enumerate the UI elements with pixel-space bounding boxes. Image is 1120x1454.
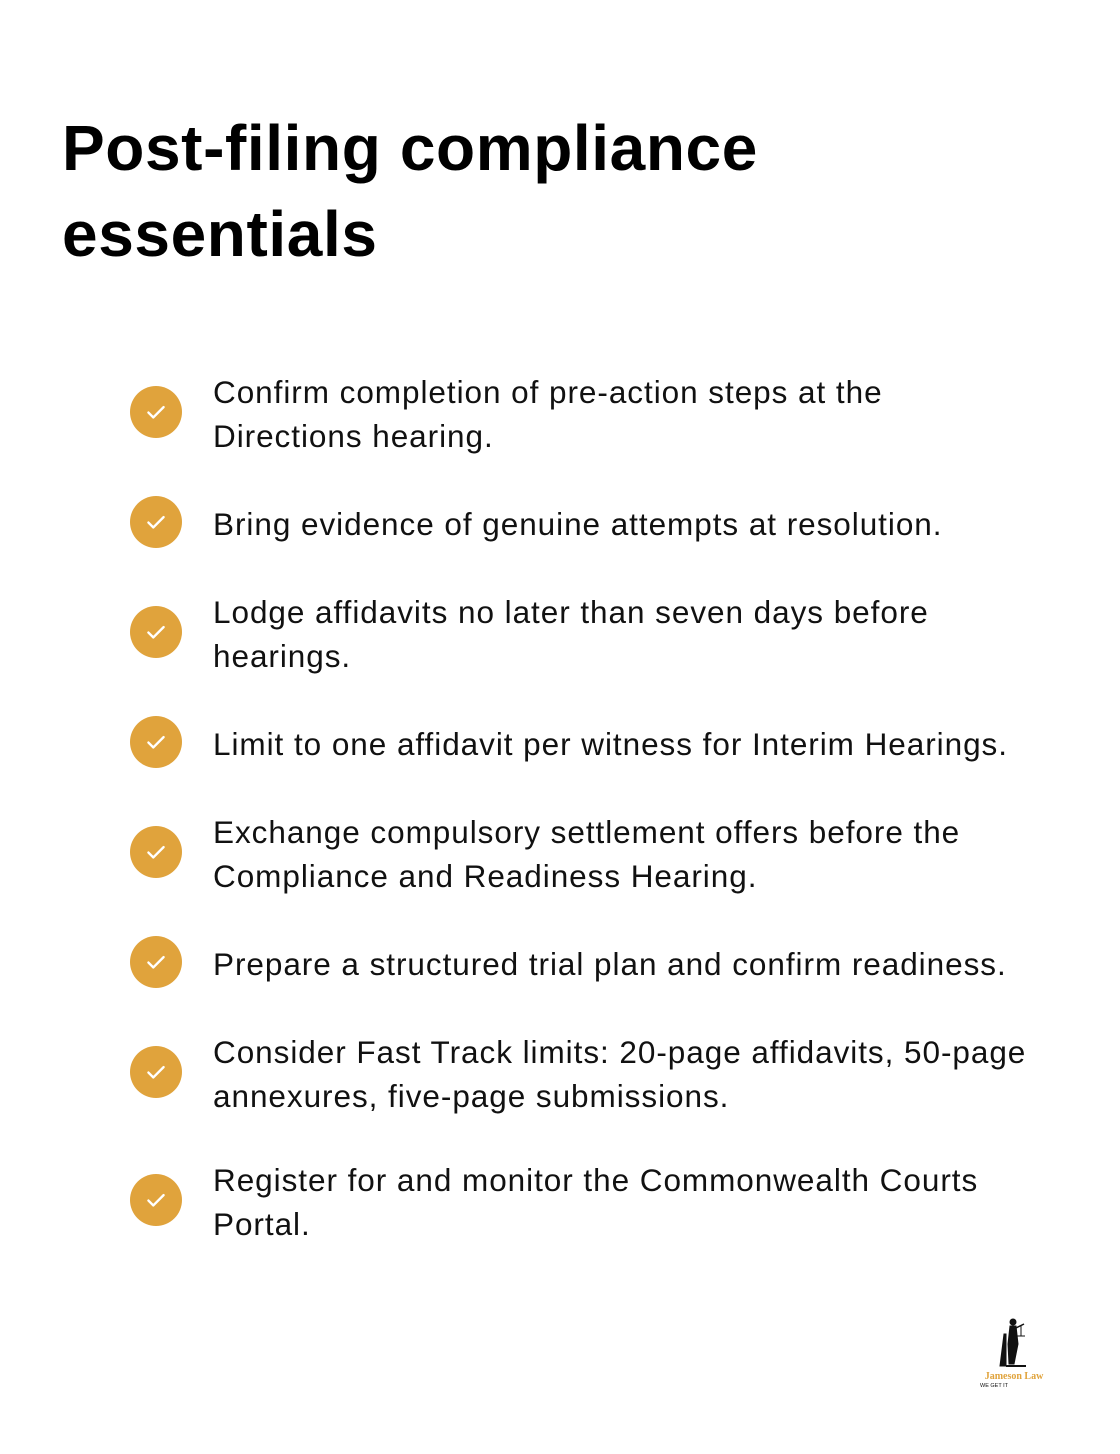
item 5: Compliance and Readiness Hearing. xyxy=(213,858,757,894)
item 5: Exchange compulsory settlement offers before the xyxy=(213,814,960,850)
logo xyxy=(980,1318,1044,1389)
logo: WE GET IT xyxy=(980,1383,1009,1389)
title: essentials xyxy=(62,198,378,270)
item 1: Directions hearing. xyxy=(213,418,494,454)
item 1: Confirm completion of pre-action steps at the xyxy=(213,374,883,410)
logo text: Jameson Law xyxy=(985,1371,1044,1382)
item 7 xyxy=(130,1034,1026,1114)
item 3 xyxy=(130,594,929,674)
item 6: Prepare a structured trial plan and confirm readiness. xyxy=(213,946,1007,982)
item 5 xyxy=(130,814,960,894)
item 4 xyxy=(130,716,1008,768)
item 4: Limit to one affidavit per witness for Interim Hearings. xyxy=(213,726,1008,762)
item 3: Lodge affidavits no later than seven days before xyxy=(213,594,929,630)
title: Post-filing compliance xyxy=(62,112,758,184)
item 7: Consider Fast Track limits: 20-page affidavits, 50-page xyxy=(213,1034,1026,1070)
item 7: annexures, five-page submissions. xyxy=(213,1078,729,1114)
item 1 xyxy=(130,374,883,454)
item 8: Register for and monitor the Commonwealth Courts xyxy=(213,1162,978,1198)
item 6 xyxy=(130,936,1007,988)
title xyxy=(62,112,758,270)
item 8 xyxy=(130,1162,978,1242)
item 8: Portal. xyxy=(213,1206,311,1242)
item 2 xyxy=(130,496,942,548)
icon: justice figure xyxy=(1000,1319,1026,1366)
item 2: Bring evidence of genuine attempts at resolution. xyxy=(213,506,942,542)
item 3: hearings. xyxy=(213,638,351,674)
